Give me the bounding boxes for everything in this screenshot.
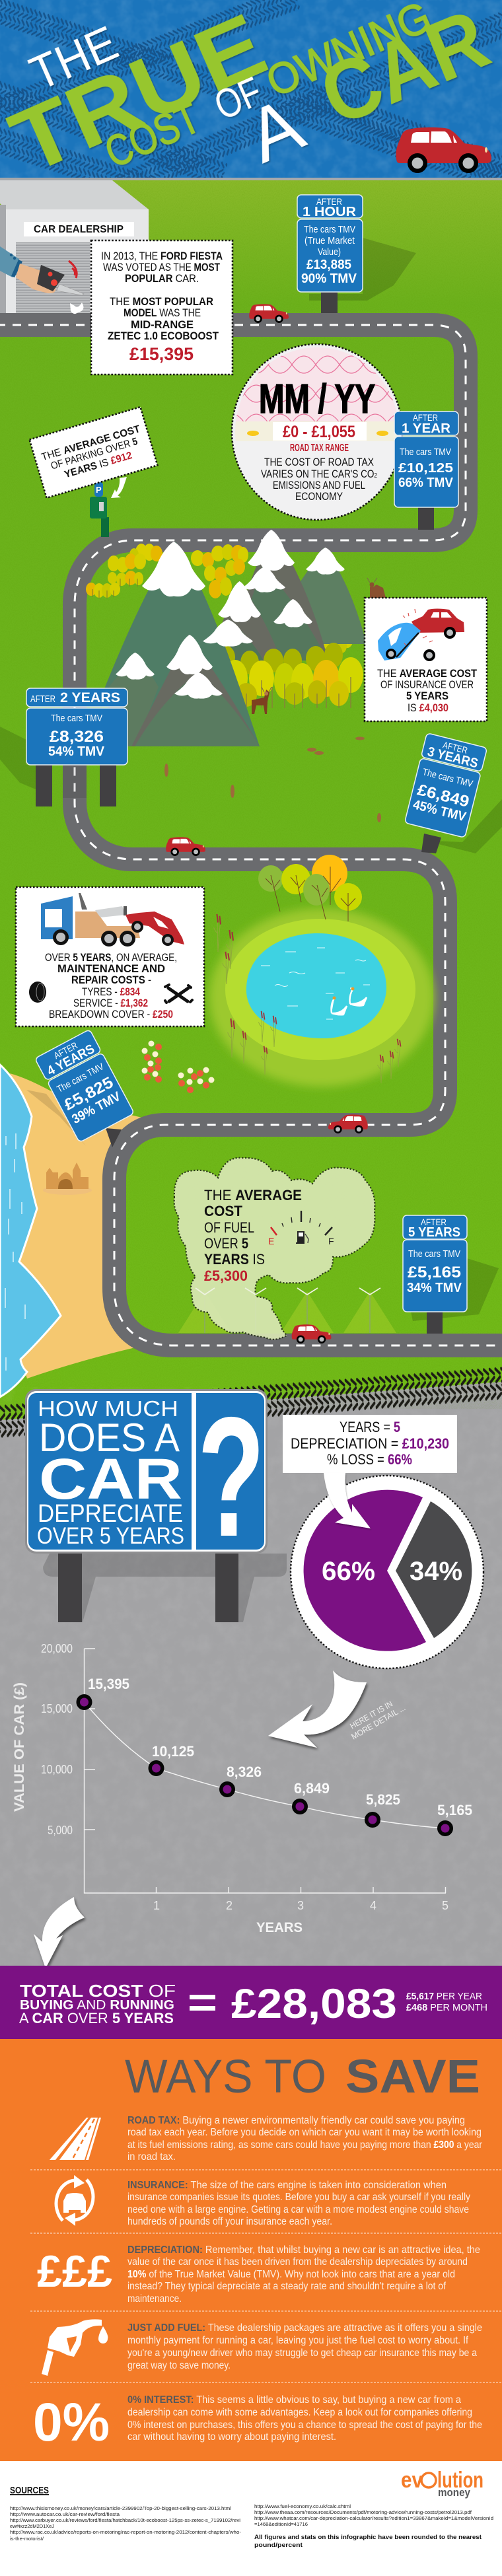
text: just add fuel	[127, 2322, 482, 2371]
text: depreciation: maintenance.	[127, 2293, 182, 2305]
sign: after 2 years: £8,326	[50, 728, 104, 746]
sources left column: http://www.autocar.co.uk/car-review/ford/fiesta	[10, 2511, 120, 2517]
title: A: A	[236, 82, 315, 179]
data labels: 15,395	[88, 1676, 129, 1692]
data labels: 6,849	[294, 1780, 330, 1797]
post of 3 years sign	[421, 834, 441, 853]
road tax disc: EMISSIONS AND FUEL	[273, 480, 365, 491]
sign: car dealership	[24, 222, 134, 236]
text: depreciation: instead? They typical depreciate at a steady rate and shouldn't require a lot of	[127, 2281, 447, 2292]
rabbits	[164, 737, 381, 822]
snowcaps: centre	[203, 581, 261, 647]
sign: after 4 years: The cars TMV	[55, 1061, 106, 1095]
equals sign	[190, 1995, 215, 2011]
text: road tax: ROAD TAX: Buying a newer environmentally friendly car could save you paying	[127, 2115, 465, 2126]
icon: car crash	[378, 609, 464, 661]
sign: how much does a car depreciate: DOES A	[39, 1415, 180, 1460]
line chart: value of car: 3	[297, 1899, 304, 1912]
sign: after 4 years: 4 YEARS	[45, 1042, 97, 1079]
tyre track	[0, 1365, 502, 1439]
mountains and forest	[86, 530, 386, 746]
sign: after 3 years: AFTER	[442, 739, 469, 756]
road tax disc: VARIES ON THE CAR'S CO2	[261, 468, 377, 480]
panel: maintenance and repair	[16, 887, 204, 1026]
sign: after 5 years: 5 YEARS	[408, 1225, 460, 1240]
forest upper middle	[191, 544, 248, 598]
text: depreciation: value of the car once it has been driven from the dealership depreciates by around	[127, 2256, 468, 2268]
sand castle	[43, 1163, 92, 1195]
icon: car on road 3	[328, 1114, 368, 1133]
text: road tax	[127, 2115, 482, 2163]
grey road surface section	[0, 1382, 502, 1966]
panel: total cost: A CAR OVER 5 YEARS	[19, 2010, 174, 2026]
icon: deer front	[252, 687, 271, 714]
street light heads	[196, 1288, 380, 1295]
data points	[77, 1694, 453, 1836]
forest right	[314, 622, 354, 653]
text: zero percent interest: car without having to worry about paying interest.	[127, 2431, 336, 2443]
flowers	[141, 1041, 214, 1093]
sign: after 4 years	[35, 1029, 134, 1143]
sign: after 1 hour: AFTER	[316, 196, 342, 207]
icon: fuel gauge: E	[268, 1236, 274, 1246]
panel: ford fiesta: MID-RANGE	[131, 319, 194, 331]
header divider	[0, 178, 502, 180]
sign: after 1 year: AFTER	[413, 412, 438, 423]
icon: car on road 2	[166, 837, 205, 856]
sea	[0, 1065, 61, 1397]
sign: after 5 years: 34% TMV	[407, 1281, 462, 1295]
logo: evolution money: money	[438, 2486, 470, 2499]
mountain: big front left	[102, 542, 260, 746]
icon: hand holding key	[0, 246, 84, 295]
sign: after 1 year: 66% TMV	[398, 476, 454, 490]
icon: pounds: £££	[37, 2246, 112, 2297]
line chart: value of car: 20,000	[41, 1642, 73, 1655]
panel: ford fiesta: MODEL WAS THE	[124, 307, 201, 319]
icon: parking meter	[90, 482, 109, 537]
data labels: 8,326	[227, 1764, 262, 1780]
sign: after 1 year: £10,125	[398, 461, 453, 476]
panel: ford fiesta: IN 2013, THE FORD FIESTA	[101, 250, 223, 262]
icon: fuel nozzle	[42, 2319, 108, 2376]
icon: road	[50, 2118, 101, 2160]
icon: car on road 1	[249, 304, 289, 323]
panel: ways to save	[0, 2039, 502, 2461]
sign: after 1 year: The cars TMV	[400, 447, 451, 458]
road	[0, 325, 502, 1345]
sign: after 1 year	[394, 411, 458, 530]
mountain: rear green	[231, 567, 328, 661]
panel: maintenance and repair: SERVICE - £1,362	[73, 997, 148, 1009]
sign: after 2 years: AFTER	[30, 694, 55, 705]
sources left column: http://www.carbuyer.co.uk/reviews/ford/fiesta/hatchback/10t-ecoboost-125ps-ss-zetec-s_7199102/revi	[10, 2517, 240, 2523]
callout: depreciation figures: DEPRECIATION = £10,230	[291, 1435, 449, 1452]
cloud: fuel cost: THE AVERAGE	[204, 1187, 302, 1203]
sign: how much does a car depreciate: HOW MUCH	[38, 1396, 178, 1421]
trees beside lake	[258, 855, 362, 921]
data labels: 5,165	[437, 1802, 472, 1818]
logo: evolution money: ev	[401, 2468, 423, 2493]
panel: ford fiesta	[91, 240, 233, 375]
title: TRUE: TRUE	[0, 0, 280, 193]
sign: after 4 years: AFTER	[52, 1040, 79, 1061]
mountain: rear grey	[225, 530, 328, 661]
road tax disc: ECONOMY	[295, 491, 343, 503]
shadow of depreciation sign	[43, 1554, 287, 1622]
callout: depreciation figures	[283, 1415, 457, 1473]
line chart: value of car: 5	[442, 1899, 448, 1912]
panel: ford fiesta: THE MOST POPULAR	[110, 296, 213, 308]
text: just add fuel: great way to save money.	[127, 2360, 231, 2371]
cloud: fuel cost: COST	[204, 1203, 243, 1219]
road tax disc: THE COST OF ROAD TAX	[264, 456, 374, 468]
axis title: years: YEARS	[256, 1920, 303, 1935]
sign: after 1 hour: The cars TMV	[304, 225, 355, 235]
sign: after 3 years	[404, 733, 487, 838]
line chart: value of car: 2	[226, 1899, 233, 1912]
line chart: value of car: 10,000	[41, 1763, 73, 1776]
panel: insurance: THE AVERAGE COST	[377, 667, 478, 680]
sources left column: is-the-motorist/	[10, 2536, 44, 2542]
panel: total cost	[0, 1966, 502, 2039]
sources right column: =1468&editionId=41716	[254, 2521, 308, 2527]
sign: how much does a car depreciate: OVER 5 YEARS	[37, 1523, 184, 1549]
cloud: fuel cost: OF FUEL	[204, 1219, 254, 1236]
sign: after 3 years: £6,849	[415, 781, 471, 811]
title: COST OF OWNING: COST	[98, 93, 207, 177]
pie chart: 66 / 34	[291, 1476, 484, 1668]
text: insurance: INSURANCE: The size of the cars engine is taken into consideration when	[127, 2180, 447, 2191]
icon: red car	[396, 127, 491, 173]
shadow of 3 years sign	[423, 799, 502, 853]
callout: depreciation figures: YEARS = 5	[340, 1419, 400, 1435]
icon: fuel gauge: F	[328, 1236, 334, 1246]
street lights	[178, 1291, 396, 1333]
data line	[85, 1702, 445, 1828]
text: zero percent interest: 0% INTEREST: This seems a little obvious to say, but buying a new car from a	[127, 2394, 461, 2406]
road tax disc: MM / YY	[259, 376, 375, 422]
line chart: value of car: 1	[153, 1899, 160, 1912]
sources right column: All figures and stats on this infographic have been rounded to the nearest	[254, 2534, 482, 2540]
panel: ford fiesta: ZETEC 1.0 ECOBOOST	[108, 330, 219, 342]
panel: total cost: BUYING AND RUNNING	[20, 1998, 174, 2013]
icon: wrench and spanner	[165, 985, 192, 1003]
mountain: centre	[198, 581, 284, 667]
sources left column	[10, 2486, 242, 2542]
text: insurance: hundreds of pounds off your insurance each year.	[127, 2216, 332, 2227]
panel: ford fiesta: £15,395	[129, 344, 194, 364]
sign: after 1 hour: Value)	[318, 247, 341, 258]
text: road tax: in road tax.	[127, 2151, 176, 2163]
panel: total cost: £28,083	[231, 1981, 397, 2027]
lake	[209, 908, 434, 1087]
text: insurance: need one with a large engine. Getting a car with a more modest engine could shave	[127, 2204, 469, 2215]
shadow of 2 years sign	[0, 727, 36, 789]
road tax disc: £0 - £1,055	[283, 423, 355, 441]
post of 4 years sign	[106, 1128, 122, 1147]
callout: depreciation figures: % LOSS = 66%	[327, 1451, 412, 1468]
sign: after 5 years	[403, 1215, 467, 1334]
icon: swans	[332, 987, 367, 1015]
sources left column: http://www.thisismoney.co.uk/money/cars/article-2399902/Top-20-biggest-selling-cars-2013.html	[10, 2505, 231, 2511]
arrow: callout to pie	[324, 1473, 371, 1528]
data labels: 5,825	[366, 1791, 400, 1808]
arrow: pie to chart	[268, 1670, 367, 1748]
panel: total cost: £5,617 PER YEAR	[406, 1991, 482, 2002]
sign: after 2 years: The cars TMV	[51, 713, 102, 724]
icon: fuel gauge	[268, 1211, 334, 1246]
sign: how much does a car depreciate	[25, 1381, 268, 1622]
panel: ford fiesta: POPULAR CAR.	[125, 273, 199, 285]
sign: after 1 hour: (True Market	[305, 236, 355, 246]
panel: maintenance and repair: REPAIR COSTS -	[71, 974, 151, 986]
mountain: far right	[301, 548, 367, 644]
text: road tax: at its fuel emissions rating, as some cars could have you paying more than £300 a year	[127, 2139, 482, 2151]
arrow: chart to total	[34, 1897, 85, 1968]
sign: after 3 years: 3 YEARS	[426, 744, 480, 771]
cloud: fuel cost: YEARS IS	[204, 1251, 265, 1268]
panel: maintenance and repair: OVER 5 YEARS, ON AVERAGE,	[45, 951, 177, 964]
shadow of 4 years sign	[26, 1090, 86, 1146]
icon: parking meter: P	[96, 485, 102, 495]
sign: after 1 year: 1 YEAR	[402, 421, 451, 436]
axis title: value of car: VALUE OF CAR (£)	[12, 1682, 27, 1812]
sign: after 4 years: 39% TMV	[69, 1089, 124, 1127]
logo: evolution money: lution	[437, 2468, 484, 2493]
panel: parking cost: OF PARKING OVER 5	[50, 436, 139, 472]
sign: after 5 years: AFTER	[421, 1217, 447, 1227]
text: depreciation	[127, 2244, 480, 2305]
sign: after 2 years: 54% TMV	[48, 744, 105, 759]
shadow of 5 years sign	[411, 1258, 499, 1321]
sources left column: http://www.rac.co.uk/advice/reports-on-motoring/rac-report-on-motoring-2012/content-chapters/who-	[10, 2529, 242, 2535]
line chart: value of car: 5,000	[48, 1824, 73, 1837]
panel: insurance	[365, 598, 487, 721]
heading: ways to save: SAVE	[345, 2051, 480, 2103]
icon: deer rear	[367, 578, 386, 598]
panel: total cost: £468 PER MONTH	[406, 2003, 487, 2013]
panel: insurance: 5 YEARS	[406, 690, 448, 702]
forest lower row	[148, 643, 363, 708]
panel: total cost: TOTAL COST OF	[20, 1981, 176, 2001]
sign: after 1 hour: £13,885	[306, 258, 351, 272]
line chart: value of car: 4	[370, 1899, 377, 1912]
text: depreciation: DEPRECIATION: Remember, that whilst buying a new car is an attractive idea, the	[127, 2244, 480, 2256]
icon: car on road 4	[292, 1324, 332, 1343]
panel: maintenance and repair: BREAKDOWN COVER - £250	[49, 1008, 173, 1020]
sign: after 1 hour	[297, 195, 363, 313]
panel: maintenance and repair: TYRES - £834	[82, 985, 140, 998]
sign: after 2 years: 2 YEARS	[60, 690, 120, 705]
logo: evolution money	[401, 2468, 484, 2499]
pie chart: 66 / 34: 66%	[322, 1557, 375, 1586]
line chart: value of car: 15,000	[41, 1702, 73, 1715]
panel: insurance: IS £4,030	[408, 701, 448, 714]
heading: ways to save	[125, 2051, 480, 2103]
sign: after 3 years: 45% TMV	[412, 797, 468, 825]
cloud: fuel cost: OVER 5	[204, 1235, 248, 1252]
sign: how much does a car depreciate: CAR	[39, 1447, 182, 1511]
sources right column: http://www.theaa.com/resources/Documents/pdf/motoring-advice/running-costs/petrol2013.pdf	[254, 2509, 472, 2515]
data labels	[88, 1676, 472, 1818]
arrow: to the box	[70, 303, 83, 314]
text: zero percent interest: dealership can come with some advantages. Keep a look out for companies offering	[127, 2407, 472, 2418]
dealership building	[0, 180, 149, 314]
road tax disc	[231, 343, 403, 520]
text: zero percent interest	[127, 2394, 482, 2443]
forest upper left	[86, 544, 162, 598]
sign: after 1 hour: 90% TMV	[301, 271, 357, 286]
arrow: to parking meter	[111, 477, 127, 498]
heading: ways to save: WAYS TO	[125, 2051, 326, 2103]
sign: how much does a car depreciate: DEPRECIATE	[38, 1500, 183, 1528]
sources right column: pound/percent	[254, 2542, 303, 2548]
data labels: 10,125	[152, 1743, 194, 1760]
text: depreciation: 10% of the True Market Value (TMV). Why not look into cars that are a year old	[127, 2269, 455, 2280]
sign: after 3 years: The cars TMV	[421, 767, 474, 790]
grass landscape	[0, 180, 502, 1420]
text: insurance	[127, 2180, 470, 2227]
text: road tax: road tax each year. Before you decide on which car you want it may be worth looking	[127, 2127, 482, 2138]
text: insurance: insurance companies issue its quotes. Before you buy a car ask yourself if you really	[127, 2192, 470, 2203]
note: here it is in more detail: HERE IT IS IN	[349, 1699, 394, 1731]
cloud: fuel cost: £5,300	[204, 1268, 248, 1284]
line chart: value of car	[12, 1642, 472, 1935]
reeds	[214, 914, 400, 1083]
icon: tow truck	[41, 893, 184, 947]
title: THE: THE	[22, 17, 126, 101]
panel: parking cost: THE AVERAGE COST	[40, 423, 142, 463]
beach	[10, 1073, 142, 1378]
panel: ford fiesta: WAS VOTED AS THE MOST	[103, 262, 220, 273]
title: COST OF OWNING	[98, 0, 438, 177]
road tax disc: ROAD TAX RANGE	[290, 443, 349, 454]
panel: maintenance and repair: MAINTENANCE AND	[57, 962, 165, 975]
sign: after 1 hour: 1 HOUR	[303, 205, 357, 219]
pie chart: 66 / 34: 34%	[410, 1557, 462, 1586]
icon: zero percent: 0%	[33, 2392, 110, 2452]
icon: car with arrows	[56, 2175, 93, 2226]
text: just add fuel: JUST ADD FUEL: These dealership packages are attractive as it offers you a single	[127, 2322, 482, 2334]
sources left column: ew#ixzz2dM2D1XeJ	[10, 2523, 54, 2529]
cloud: fuel cost	[174, 1158, 375, 1340]
sources left column: SOURCES	[10, 2486, 49, 2496]
panel: parking cost: YEARS IS £912	[63, 450, 133, 480]
icon: tyre	[29, 982, 46, 1003]
sources right column: http://www.whatcar.com/car-depreciation-calculator/results?edition1=33867&makeId=1&modelVersionId	[254, 2515, 493, 2521]
question mark: ?	[197, 1381, 265, 1572]
shadow of 1 hour sign	[309, 238, 416, 301]
note: here it is in more detail: MORE DETAIL ...	[350, 1703, 407, 1742]
sign: after 5 years: £5,165	[408, 1264, 461, 1281]
title: COST OF OWNING: OF	[208, 69, 269, 129]
panel: parking cost	[30, 407, 157, 498]
sign: car dealership: CAR DEALERSHIP	[34, 224, 124, 235]
sources right column	[254, 2503, 493, 2548]
sign: after 4 years: £5,825	[61, 1073, 116, 1114]
sign: after 2 years	[26, 688, 127, 806]
header banner	[0, 0, 502, 206]
text: just add fuel: monthly payment for running a car, leaving you just the fuel cost to worry about. If	[127, 2335, 469, 2346]
panel: insurance: OF INSURANCE OVER	[380, 678, 474, 691]
sign: after 5 years: The cars TMV	[408, 1249, 460, 1260]
mountain: front	[106, 635, 260, 746]
sources right column: http://www.fuel-economy.co.uk/calc.shtml	[254, 2503, 351, 2509]
